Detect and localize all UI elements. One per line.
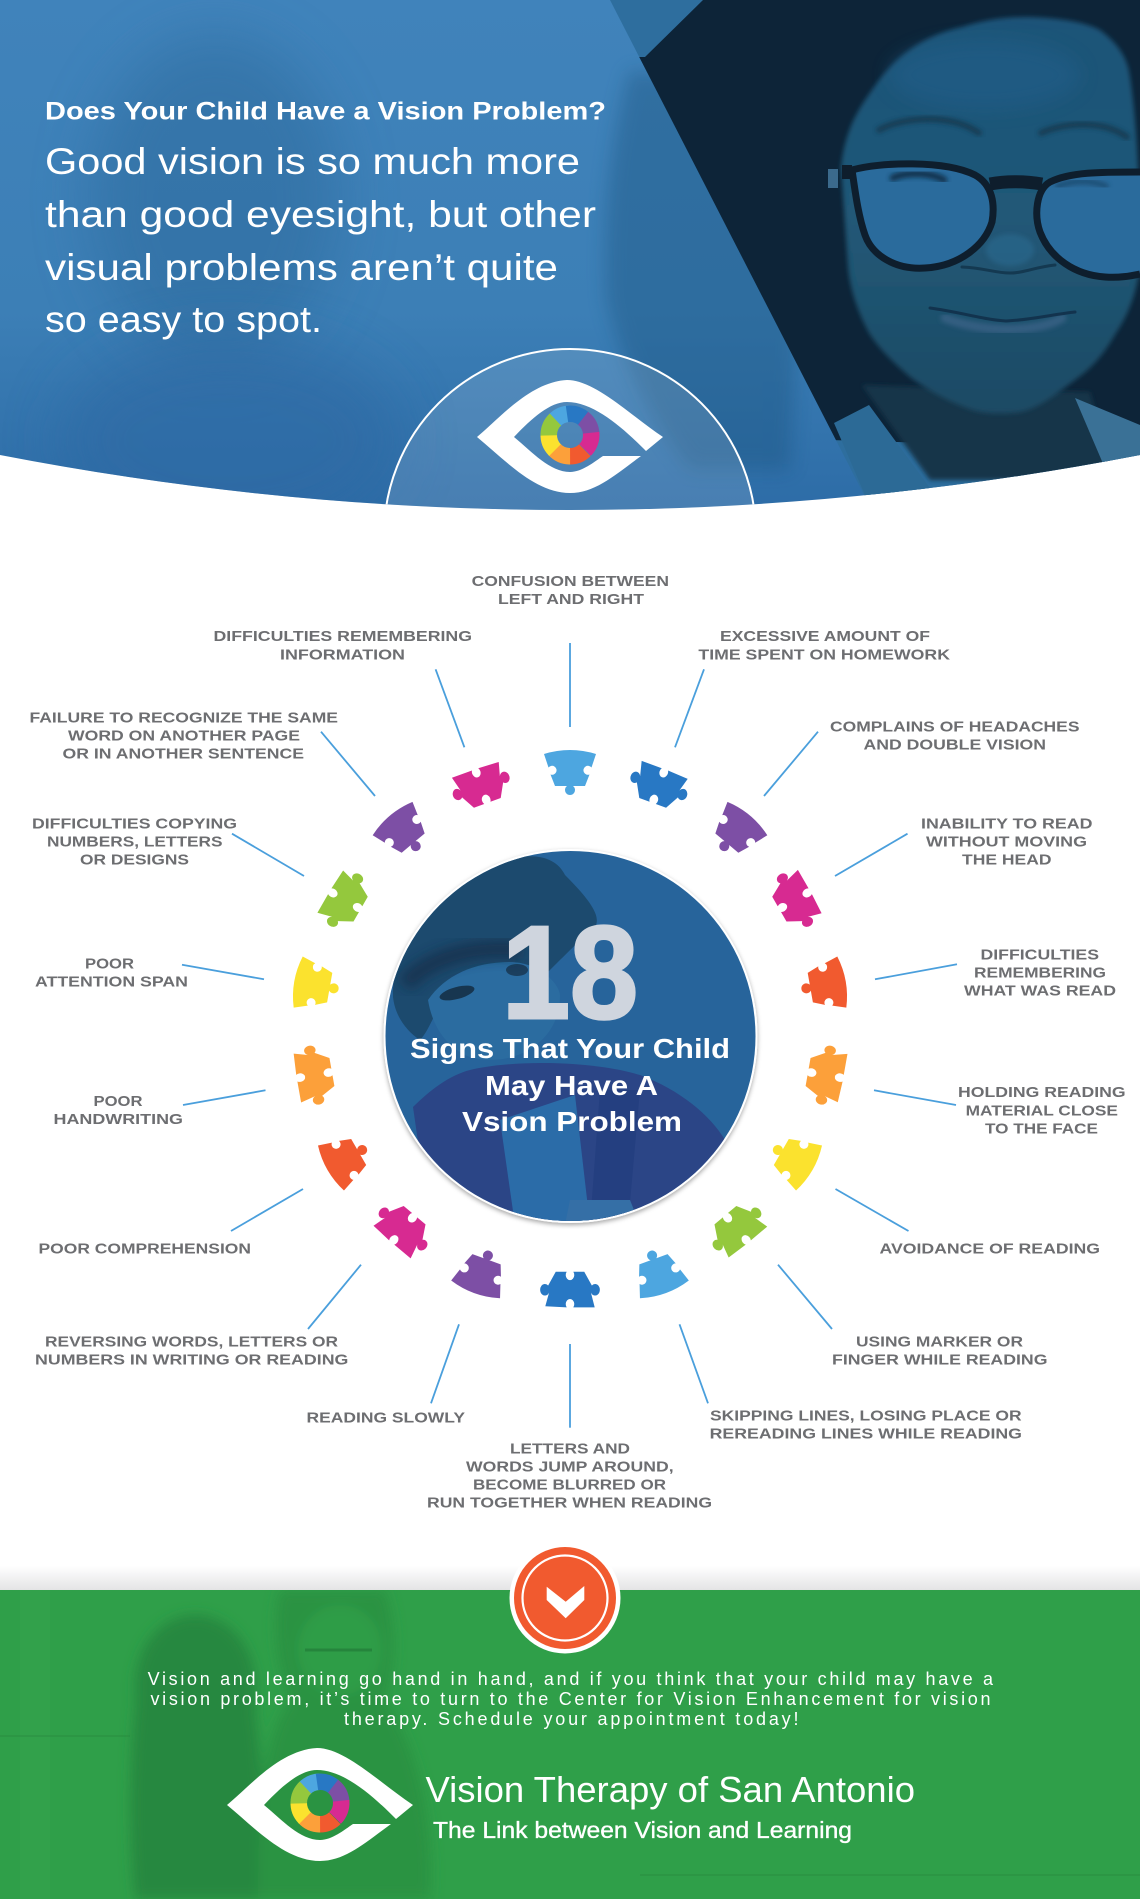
intro text: visual problems aren’t quite — [45, 247, 558, 288]
panel: footer — [0, 1542, 1140, 1899]
label: remembering what was read: WHAT WAS READ — [964, 982, 1116, 999]
label: skipping lines: REREADING LINES WHILE READING — [710, 1425, 1022, 1442]
icon: chevron — [547, 1586, 584, 1618]
label: letters jump around: BECOME BLURRED OR — [473, 1476, 666, 1493]
label: holding material close — [958, 1084, 1126, 1137]
label: remembering information: INFORMATION — [280, 646, 405, 663]
piece: magenta — [764, 865, 825, 935]
piece: purple — [701, 799, 770, 867]
piece: blue bottom — [540, 1272, 600, 1307]
piece: purple upper — [370, 799, 439, 867]
label: marker or finger — [832, 1333, 1048, 1368]
circle title: Signs That Your Child — [410, 1033, 730, 1064]
label: moving the head — [921, 815, 1093, 868]
label: confusion — [472, 573, 669, 608]
label: copying: OR DESIGNS — [80, 851, 189, 868]
label: holding material close: MATERIAL CLOSE — [966, 1102, 1118, 1119]
piece: orange left — [292, 1043, 337, 1108]
label: holding material close: TO THE FACE — [985, 1120, 1098, 1137]
label: remembering information: DIFFICULTIES REMEMBERING — [214, 628, 472, 645]
label: failure to recognize: WORD ON ANOTHER PAGE — [68, 727, 300, 744]
label: letters jump around — [427, 1440, 712, 1511]
label: marker or finger: USING MARKER OR — [856, 1333, 1023, 1350]
icon: eye logo — [477, 380, 663, 493]
piece: red — [797, 956, 850, 1015]
piece: orange — [803, 1043, 848, 1108]
label: confusion: CONFUSION BETWEEN — [472, 573, 669, 590]
header photo background — [0, 0, 1140, 540]
label: confusion: LEFT AND RIGHT — [498, 591, 644, 608]
brand name: Vision Therapy of San Antonio — [426, 1769, 915, 1810]
circle title: May Have A — [485, 1070, 658, 1101]
center circle — [380, 845, 760, 1230]
label: comprehension: POOR COMPREHENSION — [38, 1240, 251, 1257]
intro text — [45, 141, 596, 340]
label: handwriting: HANDWRITING — [54, 1111, 183, 1128]
label: avoidance: AVOIDANCE OF READING — [880, 1240, 1100, 1257]
call to action text: therapy. Schedule your appointment today! — [344, 1709, 798, 1729]
heading: Does Your Child Have a Vision Problem? — [45, 98, 606, 126]
label: homework — [698, 628, 950, 663]
piece: magenta lower — [369, 1196, 437, 1262]
label: remembering what was read — [964, 946, 1116, 999]
label: reading slowly: READING SLOWLY — [306, 1410, 465, 1427]
big number: 18 — [502, 899, 638, 1046]
circle title: Vsion Problem — [462, 1106, 682, 1137]
piece: green — [703, 1196, 771, 1262]
label: headaches — [830, 718, 1080, 753]
label: skipping lines: SKIPPING LINES, LOSING PLACE OR — [710, 1407, 1022, 1424]
label: holding material close: HOLDING READING — [958, 1084, 1126, 1101]
piece: red left — [315, 1125, 379, 1193]
label: copying — [32, 815, 237, 868]
label: remembering what was read: DIFFICULTIES — [980, 946, 1099, 963]
arrow button — [510, 1542, 620, 1654]
label: headaches: COMPLAINS OF HEADACHES — [830, 718, 1080, 735]
footer shadow — [0, 1566, 1140, 1590]
piece: yellow left — [290, 956, 343, 1015]
intro text: Good vision is so much more — [45, 141, 580, 182]
puzzle ring — [290, 750, 850, 1307]
child's face features — [879, 119, 1127, 329]
logo arch — [386, 348, 754, 510]
label: skipping lines — [710, 1407, 1022, 1442]
call to action text: Vision and learning go hand in hand, and if you think that your child may have a — [148, 1669, 994, 1689]
call to action text: vision problem, it’s time to turn to the Center for Vision Enhancement for vision — [150, 1689, 991, 1709]
piece: top light blue — [544, 750, 596, 795]
label: reversing words — [35, 1333, 348, 1368]
label: handwriting — [54, 1093, 183, 1128]
intro text: than good eyesight, but other — [45, 194, 596, 235]
piece: purple lower — [450, 1242, 514, 1302]
label: moving the head: THE HEAD — [962, 851, 1052, 868]
circle photo — [380, 845, 760, 1230]
glasses — [833, 164, 1140, 277]
piece: blue — [625, 759, 693, 813]
label: moving the head: INABILITY TO READ — [921, 815, 1093, 832]
label: homework: EXCESSIVE AMOUNT OF — [720, 628, 930, 645]
piece: light blue lower — [626, 1242, 690, 1302]
label: remembering information — [214, 628, 472, 663]
label: reversing words: NUMBERS IN WRITING OR READING — [35, 1351, 348, 1368]
call to action text — [148, 1669, 994, 1729]
label: attention span — [35, 955, 188, 990]
piece: magenta upper — [447, 759, 515, 813]
label: handwriting: POOR — [94, 1093, 143, 1110]
label: letters jump around: WORDS JUMP AROUND, — [466, 1458, 674, 1475]
piece: yellow — [761, 1125, 825, 1193]
piece: green left — [315, 865, 376, 935]
intro text: so easy to spot. — [45, 299, 322, 340]
label: failure to recognize — [30, 709, 338, 762]
label: attention span: POOR — [85, 955, 134, 972]
label: letters jump around: LETTERS AND — [510, 1440, 630, 1457]
label: letters jump around: RUN TOGETHER WHEN READING — [427, 1494, 712, 1511]
tagline: The Link between Vision and Learning — [433, 1817, 852, 1843]
label: copying: DIFFICULTIES COPYING — [32, 815, 237, 832]
footer background photo — [0, 1590, 1140, 1899]
label: attention span: ATTENTION SPAN — [35, 973, 188, 990]
label: marker or finger: FINGER WHILE READING — [832, 1351, 1048, 1368]
panel: header — [0, 0, 1140, 510]
connector lines — [182, 643, 957, 1428]
labels — [30, 573, 1126, 1511]
label: failure to recognize: FAILURE TO RECOGNIZE THE SAME — [30, 709, 338, 726]
label: moving the head: WITHOUT MOVING — [926, 833, 1087, 850]
label: remembering what was read: REMEMBERING — [974, 964, 1106, 981]
circle title — [410, 1033, 730, 1137]
label: reversing words: REVERSING WORDS, LETTERS OR — [45, 1333, 338, 1350]
label: homework: TIME SPENT ON HOMEWORK — [698, 646, 950, 663]
label: failure to recognize: OR IN ANOTHER SENTENCE — [62, 745, 304, 762]
lenses — [856, 167, 990, 265]
label: headaches: AND DOUBLE VISION — [864, 736, 1046, 753]
icon: footer eye logo — [227, 1748, 413, 1861]
label: copying: NUMBERS, LETTERS — [47, 833, 222, 850]
